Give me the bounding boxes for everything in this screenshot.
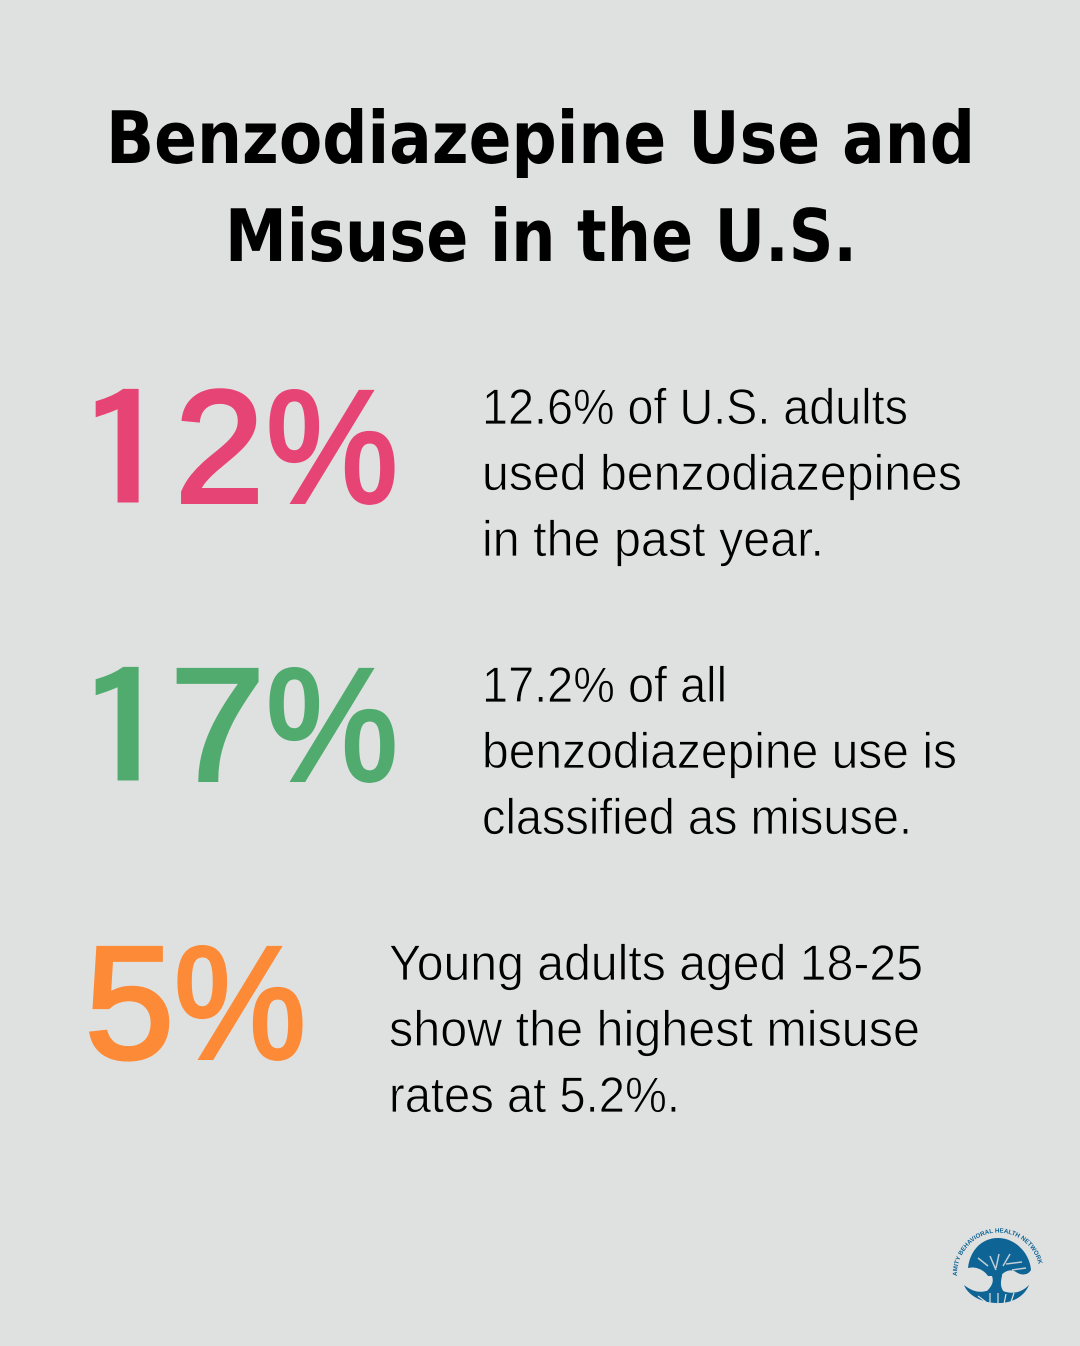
stat description: 5%: rates at 5.2%.	[389, 1067, 680, 1123]
stat number: 17%: 1	[73, 649, 177, 807]
stat number: 17%: 7	[170, 635, 265, 814]
stat number: 12%	[73, 357, 398, 536]
stat description: 12%: 12.6% of U.S. adults	[482, 379, 908, 435]
stat number: 12%: %	[266, 357, 398, 536]
stat number: 5%: 5	[85, 913, 174, 1092]
stat number: 5%	[85, 913, 306, 1092]
stat number: 5%: %	[174, 913, 306, 1092]
panel: stat 17%	[73, 635, 957, 845]
title: Misuse in the U.S.	[225, 194, 857, 278]
stat description: 12%: in the past year.	[482, 511, 824, 567]
stat description: 5%: show the highest misuse	[389, 1001, 920, 1057]
stat description: 5%: Young adults aged 18-25	[389, 935, 923, 991]
stat description: 5%	[389, 935, 923, 1123]
stat description: 17%: 17.2% of all	[482, 657, 727, 713]
icon: Amity Behavioral Health Network logo: AMITY BEHAVIORAL HEALTH NETWORK	[952, 1228, 1043, 1276]
title: Benzodiazepine Use and	[106, 96, 975, 180]
stat number: 17%	[73, 635, 398, 814]
stat description: 12%	[482, 379, 962, 567]
panel: stat 12%	[73, 357, 962, 567]
stat number: 12%: 2	[175, 357, 264, 536]
panel: stat 5%	[85, 913, 923, 1123]
stat description: 12%: used benzodiazepines	[482, 445, 962, 501]
title	[106, 96, 975, 278]
stat description: 17%: benzodiazepine use is	[482, 723, 957, 779]
icon: Amity Behavioral Health Network logo	[952, 1228, 1043, 1304]
stat number: 17%: %	[266, 635, 398, 814]
stat description: 17%	[482, 657, 957, 845]
stat description: 17%: classified as misuse.	[482, 789, 912, 845]
stat number: 12%: 1	[73, 371, 177, 529]
